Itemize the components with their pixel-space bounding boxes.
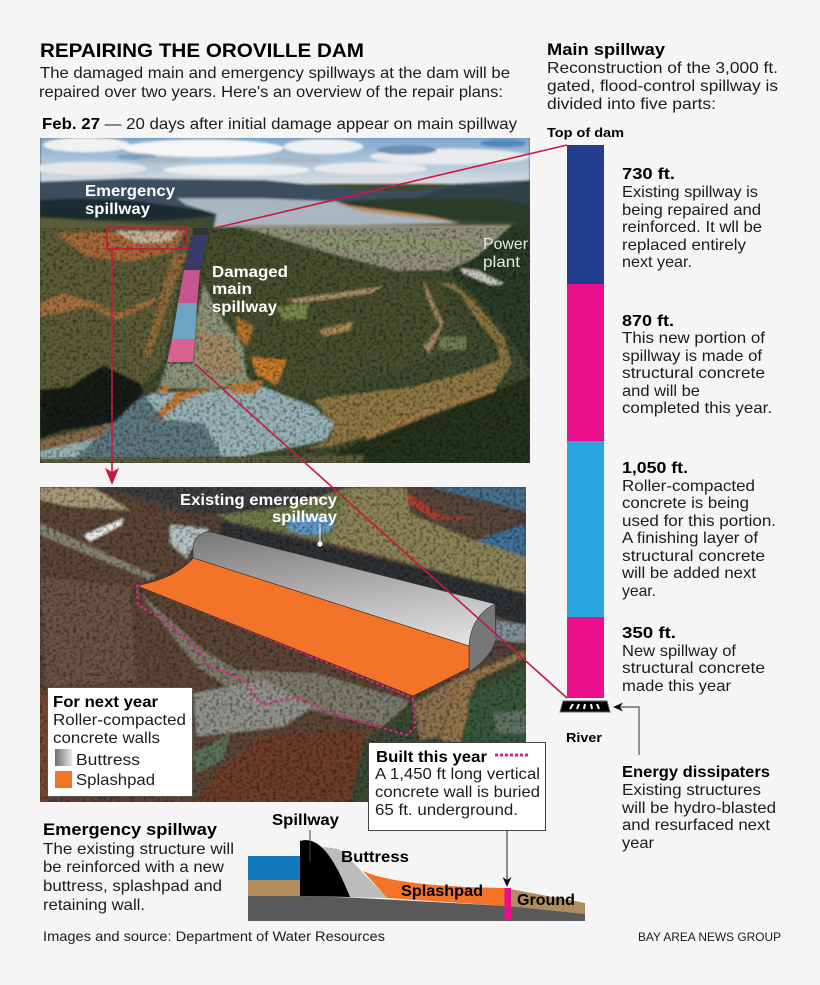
- arrow: to dissipaters: [613, 702, 639, 755]
- segment text: 870 ft: and will be: [622, 383, 700, 400]
- heading block: main spillway: Main spillway: [547, 40, 666, 59]
- callout box: for next year legend: Buttress: [76, 752, 140, 769]
- cast shadow: [40, 365, 143, 438]
- text block: emergency spillway: be reinforced with a new: [43, 859, 224, 876]
- splashpad: [140, 558, 469, 696]
- buttress: [193, 532, 496, 672]
- text block: emergency spillway: [43, 820, 234, 914]
- segment text: 350 ft: structural concrete: [622, 660, 765, 677]
- central terrain: [203, 233, 470, 398]
- segment text: 730 ft: being repaired and: [622, 202, 761, 219]
- callout box: for next year legend: Roller-compacted: [53, 712, 186, 729]
- photo label: damaged main spillway: Damaged: [212, 264, 288, 281]
- photo label: plant: plant: [483, 254, 521, 271]
- text block: emergency spillway: The existing structure will: [43, 841, 234, 858]
- intro text: The damaged main and emergency spillways at the dam will be: [40, 65, 510, 82]
- segment text: 730 ft: replaced entirely: [622, 237, 746, 254]
- label: river: River: [566, 730, 602, 745]
- callout box: built this year: 65 ft. underground.: [375, 802, 518, 819]
- callout box: for next year legend: For next year: [53, 694, 158, 711]
- heading block: main spillway: gated, flood-control spillway is: [547, 78, 778, 95]
- segment text: 870 ft: [622, 313, 772, 417]
- segment text: 730 ft: Existing spillway is: [622, 184, 758, 201]
- label: top of dam: Top of dam: [547, 125, 624, 140]
- heading block: main spillway: [547, 40, 778, 113]
- callout box: for next year legend: concrete walls: [53, 730, 160, 747]
- runway of existing spillway: [103, 487, 350, 513]
- segment text: 730 ft: 730 ft.: [622, 166, 675, 183]
- title: REPAIRING THE OROVILLE DAM: [40, 40, 364, 62]
- icon: energy dissipaters: [560, 701, 610, 712]
- segment text: 350 ft: [622, 625, 765, 695]
- segment text: 870 ft: spillway is made of: [622, 348, 763, 365]
- text block: emergency spillway: buttress, splashpad and: [43, 878, 222, 895]
- source credit: Images and source: Department of Water Resources: [43, 928, 385, 944]
- label: splashpad: Splashpad: [401, 883, 483, 900]
- segment text: 870 ft: completed this year.: [622, 400, 772, 417]
- lower right: [350, 647, 526, 802]
- segment text: 870 ft: 870 ft.: [622, 313, 674, 330]
- spillway segment bar: [567, 145, 604, 698]
- ground upper left: [40, 487, 197, 585]
- text block: energy dissipaters: will be hydro-blasted: [621, 800, 776, 817]
- segment text: 1,050 ft: Roller-compacted: [622, 478, 755, 495]
- callout box: built this year: A 1,450 ft long vertical: [375, 766, 540, 783]
- segment text: 730 ft: reinforced. It wll be: [622, 219, 762, 236]
- segment text: 350 ft: made this year: [622, 678, 732, 695]
- text block: emergency spillway: retaining wall.: [43, 897, 145, 914]
- callout box: built this year: concrete wall is buried: [375, 784, 540, 801]
- distant hills: [40, 178, 530, 218]
- text block: energy dissipaters: and resurfaced next: [622, 817, 771, 834]
- grass and shore: [263, 487, 526, 593]
- segment text: 1,050 ft: [621, 460, 776, 600]
- callout box: built this year: [368, 742, 546, 830]
- photo: aerial view of dam: [33, 137, 530, 463]
- text block: emergency spillway: Emergency spillway: [43, 820, 218, 839]
- callout box: built this year: Built this year: [376, 749, 487, 766]
- callout box: for next year legend: Splashpad: [76, 772, 155, 789]
- segment text: 1,050 ft: concrete is being: [622, 495, 749, 512]
- segment text: 730 ft: [622, 166, 762, 271]
- text block: energy dissipaters: year: [622, 835, 655, 852]
- concrete wall: [217, 522, 526, 627]
- main spillway colour overlay: [167, 228, 208, 362]
- segment text: 350 ft: New spillway of: [622, 643, 737, 660]
- damaged slope: [158, 283, 257, 392]
- left terrain: [40, 217, 193, 393]
- segment text: 1,050 ft: structural concrete: [622, 548, 765, 565]
- segment text: 1,050 ft: will be added next: [621, 565, 757, 582]
- photo label: spillway line two: spillway: [272, 509, 337, 526]
- built-this-year wall dashed outline: [137, 585, 415, 735]
- segment text: 350 ft: 350 ft.: [622, 625, 676, 642]
- debris fan: [40, 387, 334, 462]
- segment text: 870 ft: structural concrete: [622, 365, 765, 382]
- leader dot: [317, 524, 323, 547]
- segment text: 1,050 ft: used for this portion.: [622, 513, 776, 530]
- photo caption: Feb. 27 — 20 days after initial damage appear on main spillway: [42, 116, 517, 133]
- publisher credit: BAY AREA NEWS GROUP: [638, 930, 781, 944]
- intro text: [39, 65, 510, 101]
- photo label: damaged main spillway: main: [212, 281, 252, 298]
- label: buttress: Buttress: [341, 849, 409, 866]
- segment text: 1,050 ft: A finishing layer of: [622, 530, 759, 547]
- photo label: emergency spillway: spillway: [85, 201, 150, 218]
- lower right forest: [317, 377, 530, 463]
- swatch: buttress: [55, 749, 72, 766]
- arrow: wall callout to diagram: [502, 831, 512, 887]
- text block: energy dissipaters: Energy dissipaters: [622, 764, 770, 781]
- label: ground: Ground: [517, 892, 575, 909]
- photo label: power plant: Power: [483, 236, 529, 253]
- callout box: for next year legend: [48, 688, 192, 796]
- foreground terrain: [40, 547, 413, 802]
- right forest: [450, 219, 530, 370]
- red connector lines: [105, 145, 567, 698]
- segment text: 1,050 ft: 1,050 ft.: [622, 460, 688, 477]
- photo label: existing emergency spillway: Existing emergency: [180, 492, 337, 509]
- river: [307, 283, 512, 448]
- segment text: 1,050 ft: year.: [622, 583, 656, 600]
- text block: energy dissipaters: [621, 764, 776, 852]
- reservoir: [177, 198, 460, 227]
- photo label: damaged main spillway: spillway: [212, 299, 277, 316]
- segment text: 870 ft: This new portion of: [622, 330, 766, 347]
- heading block: main spillway: Reconstruction of the 3,000 ft.: [547, 60, 778, 77]
- diagram: spillway cross-section: [248, 812, 585, 921]
- heading block: main spillway: divided into five parts:: [547, 96, 716, 113]
- swatch: splashpad: [55, 771, 72, 788]
- segment text: 730 ft: next year.: [622, 254, 692, 271]
- photo label: damaged main spillway: [212, 264, 288, 316]
- photo label: emergency spillway: Emergency: [85, 183, 175, 200]
- photo: emergency spillway site: [40, 487, 526, 802]
- photo label: emergency spillway: [85, 183, 175, 218]
- earthen dam face: [230, 225, 512, 271]
- label: spillway: Spillway: [272, 812, 339, 829]
- sky and clouds: [33, 137, 530, 184]
- intro text: repaired over two years. Here's an overview of the repair plans:: [39, 84, 503, 101]
- text block: energy dissipaters: Existing structures: [622, 782, 761, 799]
